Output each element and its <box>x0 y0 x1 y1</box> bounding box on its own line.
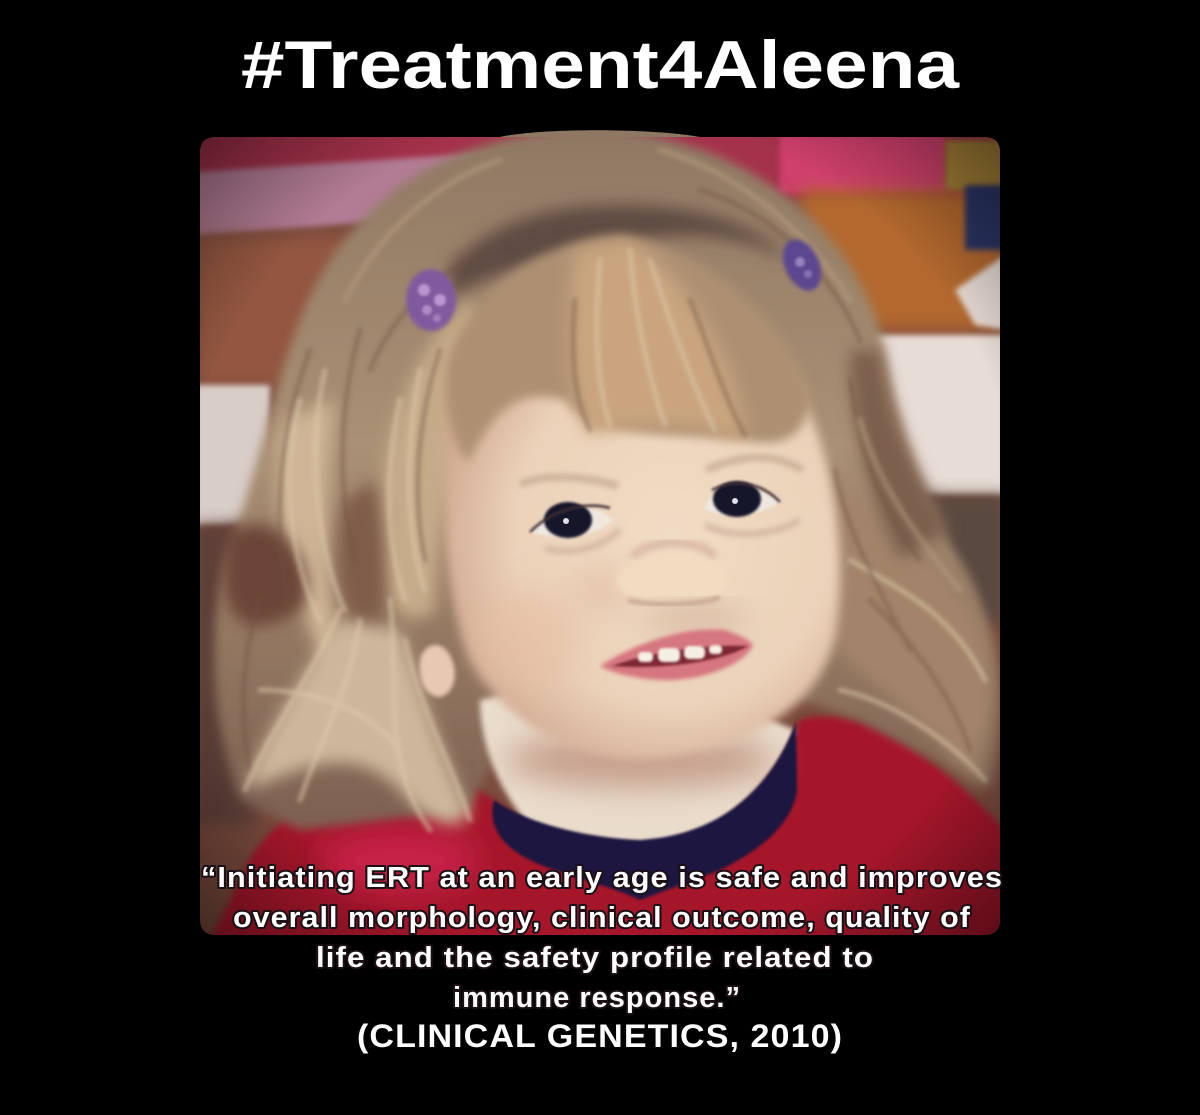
quote text: “Initiating ERT at an early age is safe and improves <box>201 862 1003 894</box>
face <box>442 392 846 760</box>
photo: smiling child <box>195 130 1005 940</box>
nose <box>617 543 750 628</box>
hair above photo edge <box>500 130 700 137</box>
bangs <box>446 235 812 462</box>
eye: right <box>704 481 780 517</box>
title: #Treatment4Aleena <box>241 27 960 103</box>
eye shadow <box>545 520 800 551</box>
quote text: overall morphology, clinical outcome, quality of <box>233 902 971 934</box>
hair clip: right <box>781 237 824 293</box>
collar <box>492 722 797 900</box>
eye: left <box>530 502 613 538</box>
quote text <box>201 862 1003 1014</box>
mouth <box>600 629 753 680</box>
cheeks <box>516 569 622 666</box>
photo background <box>195 130 1005 940</box>
quote text: immune response.” <box>453 982 741 1014</box>
photo vignette <box>195 130 1005 940</box>
eyebrows <box>520 457 803 486</box>
hair clip: left <box>406 269 456 331</box>
hair strands <box>243 150 985 830</box>
hair mass <box>214 130 1000 830</box>
citation: (CLINICAL GENETICS, 2010) <box>357 1018 843 1054</box>
ear <box>420 645 455 697</box>
quote text: life and the safety profile related to <box>316 942 874 974</box>
neck <box>476 694 798 842</box>
shirt <box>210 716 1005 940</box>
